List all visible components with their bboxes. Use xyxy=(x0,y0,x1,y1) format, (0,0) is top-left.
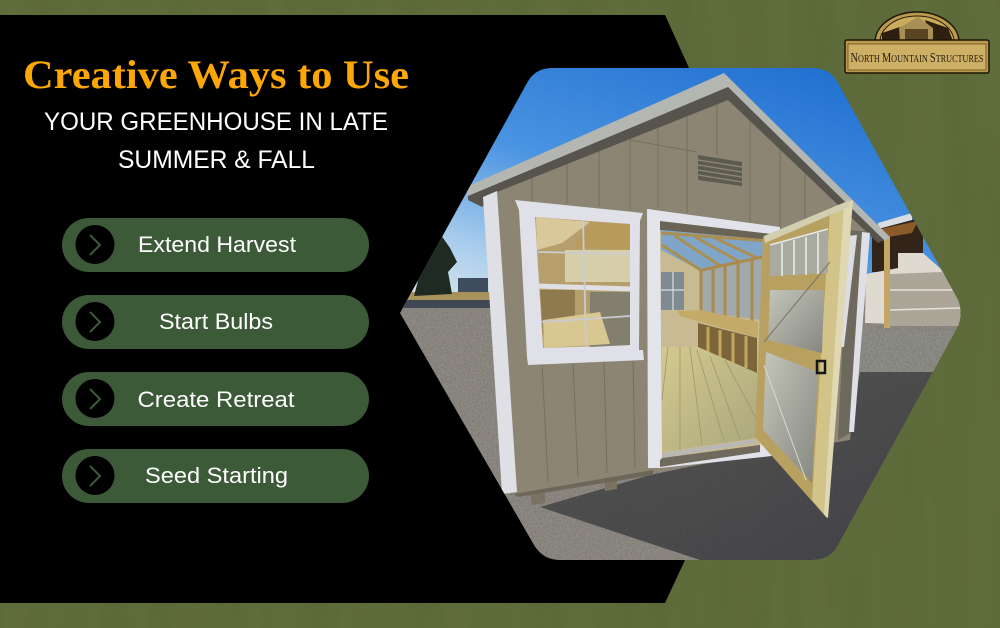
shed wall xyxy=(488,92,870,494)
open door xyxy=(755,200,853,518)
vent xyxy=(698,155,742,186)
pill: Extend Harvest: Extend Harvest xyxy=(138,232,296,257)
logo: North Mountain Structures xyxy=(845,12,989,73)
roof xyxy=(466,73,890,241)
base band xyxy=(660,445,760,467)
threshold xyxy=(662,439,756,458)
pill: Seed Starting: Seed Starting xyxy=(145,463,288,488)
hexagon photo: greenhouse shed xyxy=(400,68,965,560)
pill: Extend Harvest xyxy=(62,218,369,272)
latch xyxy=(817,361,825,373)
far right wall and trim xyxy=(838,230,870,440)
corner trim xyxy=(483,191,517,494)
gravel grain xyxy=(400,306,965,560)
left jamb xyxy=(648,209,660,468)
sky xyxy=(400,68,965,308)
wall boards xyxy=(532,100,805,482)
interior side windows xyxy=(702,258,762,320)
door frame and interior xyxy=(647,209,780,468)
pill: Start Bulbs: Start Bulbs xyxy=(159,309,273,334)
lumber yard xyxy=(872,218,923,272)
subtitle: SUMMER & FALL xyxy=(118,146,315,174)
ground: gravel xyxy=(400,296,965,560)
bench xyxy=(677,310,758,338)
support blocks xyxy=(530,492,545,505)
pill: Create Retreat xyxy=(62,372,369,426)
left window xyxy=(515,200,644,365)
pill: Seed Starting xyxy=(62,449,369,503)
door head xyxy=(660,221,772,240)
logo: North Mountain Structures: NORTH MOUNTAIN STRUCTURES xyxy=(850,51,984,66)
logo plaque xyxy=(845,40,989,73)
trusses and roof glass xyxy=(661,230,763,269)
back window xyxy=(661,272,684,310)
subtitle: YOUR GREENHOUSE IN LATE xyxy=(44,108,388,136)
distant tree and building xyxy=(414,236,457,296)
pill: Start Bulbs xyxy=(62,295,369,349)
logo house xyxy=(899,17,933,41)
pill: Create Retreat: Create Retreat xyxy=(138,387,294,412)
title: Creative Ways to Use xyxy=(23,52,409,97)
subtitle xyxy=(44,108,388,174)
under bench wall xyxy=(698,323,757,373)
horizon strips xyxy=(400,292,490,300)
black panel xyxy=(0,15,800,603)
road and asphalt shadow xyxy=(932,332,955,372)
floor xyxy=(662,347,757,452)
